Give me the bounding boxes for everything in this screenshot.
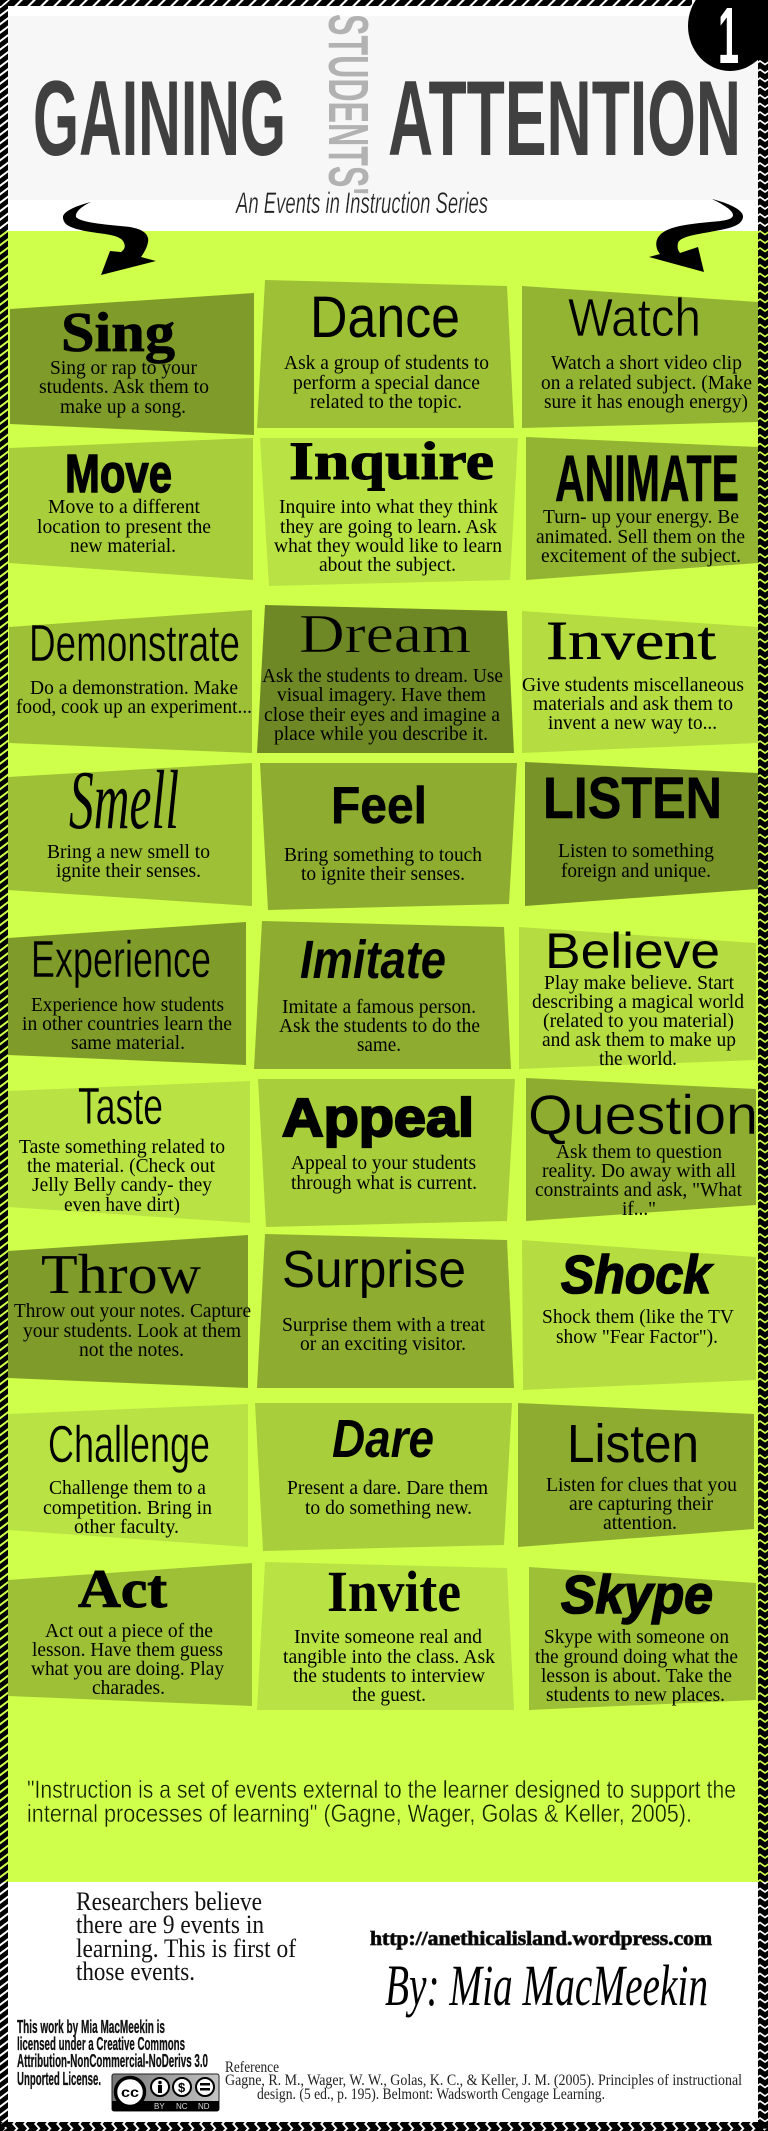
text: Watch: sure it has enough energy) xyxy=(544,392,748,413)
text: Experience: same material. xyxy=(71,1033,185,1054)
text: Believe: Play make believe. Start xyxy=(544,973,735,994)
text: Dare: Present a dare. Dare them xyxy=(287,1478,488,1499)
text: Appeal: Appeal to your students xyxy=(291,1153,476,1174)
title: Gaining: GAINING xyxy=(33,58,286,178)
text: Believe: the world. xyxy=(599,1049,677,1070)
text: Skype: lesson is about. Take the xyxy=(541,1666,732,1687)
text: Taste: Taste something related to xyxy=(19,1137,225,1158)
text: Dream: visual imagery. Have them xyxy=(277,685,486,706)
text: Invent: invent a new way to... xyxy=(548,713,717,734)
text: Sing: Sing or rap to your xyxy=(50,358,197,379)
text: Imitate: Ask the students to do the xyxy=(279,1016,480,1037)
heading: Believe: Believe xyxy=(545,923,720,979)
text: Animate xyxy=(536,507,745,567)
text: Dream: place while you describe it. xyxy=(274,724,488,745)
text: Feel xyxy=(284,845,482,885)
text: Question: if..." xyxy=(622,1199,656,1220)
text: Dream: Ask the students to dream. Use xyxy=(262,666,503,687)
text: Inquire: about the subject. xyxy=(319,555,456,576)
text: Experience: Experience how students xyxy=(31,995,224,1016)
heading: Skype: Skype xyxy=(561,1565,713,1625)
heading: Listen: Listen xyxy=(567,1414,699,1474)
text: Challenge: other faculty. xyxy=(74,1517,179,1538)
text: Believe: and ask them to make up xyxy=(542,1030,736,1051)
text: Watch: Watch a short video clip xyxy=(551,353,742,374)
text: Question: constraints and ask, "What xyxy=(535,1180,743,1201)
license text: This work by Mia MacMeekin is xyxy=(17,2017,165,2037)
heading: Demonstrate: Demonstrate xyxy=(29,615,240,673)
heading: Surprise: Surprise xyxy=(282,1241,466,1299)
text: Feel: to ignite their senses. xyxy=(301,864,465,885)
heading: Sing: Sing xyxy=(61,302,175,364)
text: Experience xyxy=(22,995,232,1054)
heading: Question: Question xyxy=(528,1083,758,1146)
panel: Dance xyxy=(257,280,514,428)
text: LISTEN: Listen to something xyxy=(558,841,714,862)
panel: Imitate xyxy=(254,921,511,1069)
text: Skype: students to new places. xyxy=(546,1685,725,1706)
text: researchers note: those events. xyxy=(76,1957,195,1986)
text: researchers note: learning. This is first of xyxy=(76,1934,296,1963)
panel: LISTEN xyxy=(525,762,758,906)
text: Taste: even have dirt) xyxy=(64,1195,180,1216)
text: Believe xyxy=(532,973,744,1070)
heading: Invent: Invent xyxy=(546,610,716,671)
panel: Act xyxy=(8,1559,252,1706)
text: Challenge: competition. Bring in xyxy=(43,1498,212,1519)
heading: Dance: Dance xyxy=(310,285,460,350)
text: Invite: Invite someone real and xyxy=(294,1627,482,1648)
text: Move: location to present the xyxy=(37,517,211,538)
text: Invent: materials and ask them to xyxy=(533,694,733,715)
heading: Shock: Shock xyxy=(561,1245,714,1305)
panel: Believe xyxy=(519,923,756,1070)
text: Demonstrate xyxy=(16,678,252,718)
icon: creative commons badge: BY xyxy=(154,2102,165,2111)
text: researchers note xyxy=(76,1887,296,1986)
text: Listen: attention. xyxy=(603,1513,677,1534)
text: LISTEN xyxy=(558,841,714,882)
text: Surprise xyxy=(282,1315,486,1355)
panel: Sing xyxy=(10,293,254,435)
heading: Smell: Smell xyxy=(69,754,179,847)
text: Watch: on a related subject. (Make xyxy=(541,373,752,394)
text: Feel: Bring something to touch xyxy=(284,845,482,866)
text: Act xyxy=(31,1621,224,1699)
heading: LISTEN: LISTEN xyxy=(543,766,722,831)
text: Experience: in other countries learn the xyxy=(22,1014,232,1035)
text: Move: new material. xyxy=(70,536,176,557)
text: Invite xyxy=(283,1627,495,1706)
text: Taste: Jelly Belly candy- they xyxy=(32,1175,212,1196)
text: researchers note: Researchers believe xyxy=(76,1887,262,1916)
license text: Unported License. xyxy=(17,2069,101,2089)
heading: Watch: Watch xyxy=(568,288,701,348)
text: Sing: students. Ask them to xyxy=(39,377,209,398)
heading: Dare: Dare xyxy=(332,1409,434,1469)
text: Taste xyxy=(19,1137,225,1216)
text: Move xyxy=(37,497,211,557)
panel: Dream xyxy=(257,603,514,753)
heading: Experience: Experience xyxy=(31,931,211,989)
text: Smell: ignite their senses. xyxy=(56,861,201,882)
text: Act: what you are doing. Play xyxy=(31,1659,224,1680)
license text: Attribution-NonCommercial-NoDerivs 3.0 xyxy=(17,2051,208,2071)
text: Animate: excitement of the subject. xyxy=(541,546,741,567)
text: Act: lesson. Have them guess xyxy=(32,1640,223,1661)
text: Invite: the guest. xyxy=(352,1685,426,1706)
license text xyxy=(17,2017,208,2089)
text: Inquire: Inquire into what they think xyxy=(279,497,498,518)
reference xyxy=(225,2059,742,2103)
text: Challenge: Challenge them to a xyxy=(49,1478,206,1499)
text: Imitate: Imitate a famous person. xyxy=(282,997,476,1018)
text: Dare: to do something new. xyxy=(305,1498,472,1519)
text: Dream: close their eyes and imagine a xyxy=(264,705,500,726)
text: Throw: not the notes. xyxy=(79,1340,184,1361)
text: Listen: are capturing their xyxy=(569,1494,713,1515)
text: Listen: Listen for clues that you xyxy=(546,1475,737,1496)
text: Invent xyxy=(522,675,744,734)
heading: Move: Move xyxy=(65,444,172,504)
text: Question xyxy=(535,1142,743,1220)
text: Invite: the students to interview xyxy=(293,1666,485,1687)
panel: Skype xyxy=(529,1565,756,1710)
text: Skype: Skype with someone on xyxy=(544,1627,729,1648)
panel: Dare xyxy=(255,1403,512,1551)
panel: Question xyxy=(526,1078,758,1221)
text: Believe: (related to you material) xyxy=(543,1011,734,1032)
text: Question: reality. Do away with all xyxy=(542,1161,737,1182)
text: Dream xyxy=(262,666,503,745)
reference: design. (5 ed., p. 195). Belmont: Wadsworth Cengage Learning. xyxy=(257,2086,605,2103)
panel: Invent xyxy=(522,610,758,753)
badge: number 1 xyxy=(688,0,768,80)
heading: Feel: Feel xyxy=(331,777,427,835)
icon: creative commons badge: NC xyxy=(176,2102,188,2111)
reference: Reference xyxy=(225,2059,279,2076)
text: Move: Move to a different xyxy=(48,497,201,518)
panel: Appeal xyxy=(258,1079,515,1227)
text: Taste: the material. (Check out xyxy=(27,1156,216,1177)
text: Smell: Bring a new smell to xyxy=(47,842,210,863)
text: Appeal: through what is current. xyxy=(291,1173,477,1194)
text: Smell xyxy=(47,842,210,882)
panel: Smell xyxy=(8,754,252,906)
text: Challenge xyxy=(43,1478,212,1538)
arrow: right xyxy=(649,199,743,272)
subtitle: An Events in Instruction Series xyxy=(235,187,488,220)
heading: Taste: Taste xyxy=(78,1078,163,1136)
panel: Move xyxy=(9,438,253,580)
icon: creative commons badge: ND xyxy=(198,2102,210,2111)
panel: Watch xyxy=(522,286,758,428)
text: Inquire: what they would like to learn xyxy=(274,536,502,557)
text: Sing xyxy=(39,358,209,418)
title: vertical Students': STUDENTS' xyxy=(316,14,380,195)
text: Appeal xyxy=(291,1153,477,1194)
panel: Feel xyxy=(260,763,517,910)
heading: Imitate: Imitate xyxy=(300,930,446,990)
panel: Animate xyxy=(526,437,758,580)
heading: Challenge: Challenge xyxy=(48,1416,210,1474)
heading: Act: Act xyxy=(78,1559,167,1619)
text: Demonstrate: Do a demonstration. Make xyxy=(30,678,238,699)
text: Animate: animated. Sell them on the xyxy=(536,527,745,548)
text: Surprise: Surprise them with a treat xyxy=(282,1315,486,1336)
text: Animate: Turn- up your energy. Be xyxy=(543,507,739,528)
text: Believe: describing a magical world xyxy=(532,992,744,1013)
text: Dance: related to the topic. xyxy=(310,392,462,413)
text: Watch xyxy=(541,353,752,413)
text: Dance xyxy=(284,353,489,413)
panel: Challenge xyxy=(8,1404,248,1547)
heading: Appeal: Appeal xyxy=(282,1088,474,1148)
panel: Surprise xyxy=(257,1234,514,1388)
text: Inquire xyxy=(274,497,502,576)
text: Invite: tangible into the class. Ask xyxy=(283,1647,495,1668)
panel: Listen xyxy=(518,1403,754,1547)
heading: Throw: Throw xyxy=(41,1244,202,1306)
text: Demonstrate: food, cook up an experiment... xyxy=(16,697,252,718)
heading: Inquire: Inquire xyxy=(289,431,494,491)
text: Act: charades. xyxy=(92,1678,165,1699)
text: Throw: your students. Look at them xyxy=(23,1321,241,1342)
text: Skype: the ground doing what the xyxy=(535,1647,738,1668)
license text: licensed under a Creative Commons xyxy=(17,2034,185,2054)
panel: Inquire xyxy=(260,431,518,586)
heading: Dream: Dream xyxy=(299,603,471,664)
text: Skype xyxy=(535,1627,738,1706)
text: Dance: perform a special dance xyxy=(293,373,480,394)
text: Imitate: same. xyxy=(357,1035,401,1056)
heading: Invite: Invite xyxy=(327,1559,461,1624)
icon: creative commons badge xyxy=(112,2074,219,2111)
text: Inquire: they are going to learn. Ask xyxy=(280,517,497,538)
icon: creative commons badge: cc xyxy=(121,2084,139,2100)
text: Shock: Shock them (like the TV xyxy=(542,1307,734,1328)
text: Shock xyxy=(542,1307,734,1348)
website url: http://anethicalisland.wordpress.com xyxy=(370,1928,712,1950)
text: Surprise: or an exciting visitor. xyxy=(300,1334,466,1355)
quote xyxy=(27,1776,736,1828)
text: Imitate xyxy=(279,997,480,1056)
text: Listen xyxy=(546,1475,737,1534)
text: Invent: Give students miscellaneous xyxy=(522,675,744,696)
text: Shock: show "Fear Factor"). xyxy=(556,1327,718,1348)
text: Throw: Throw out your notes. Capture xyxy=(14,1301,251,1322)
panel: Throw xyxy=(8,1235,251,1388)
panel: Shock xyxy=(522,1240,756,1390)
text: Act: Act out a piece of the xyxy=(45,1621,213,1642)
text: LISTEN: foreign and unique. xyxy=(561,861,711,882)
text: Sing: make up a song. xyxy=(60,397,186,418)
text: researchers note: there are 9 events in xyxy=(76,1910,264,1939)
text: Question: Ask them to question xyxy=(556,1142,722,1163)
arrow: left xyxy=(63,202,156,275)
text: Throw xyxy=(14,1301,251,1361)
text: Dance: Ask a group of students to xyxy=(284,353,489,374)
icon: creative commons badge: $ xyxy=(178,2080,186,2095)
panel: Demonstrate xyxy=(9,610,252,753)
panel: Invite xyxy=(257,1559,514,1710)
panel: Experience xyxy=(8,922,246,1065)
panel: Taste xyxy=(8,1078,250,1223)
text: Dare xyxy=(287,1478,488,1519)
